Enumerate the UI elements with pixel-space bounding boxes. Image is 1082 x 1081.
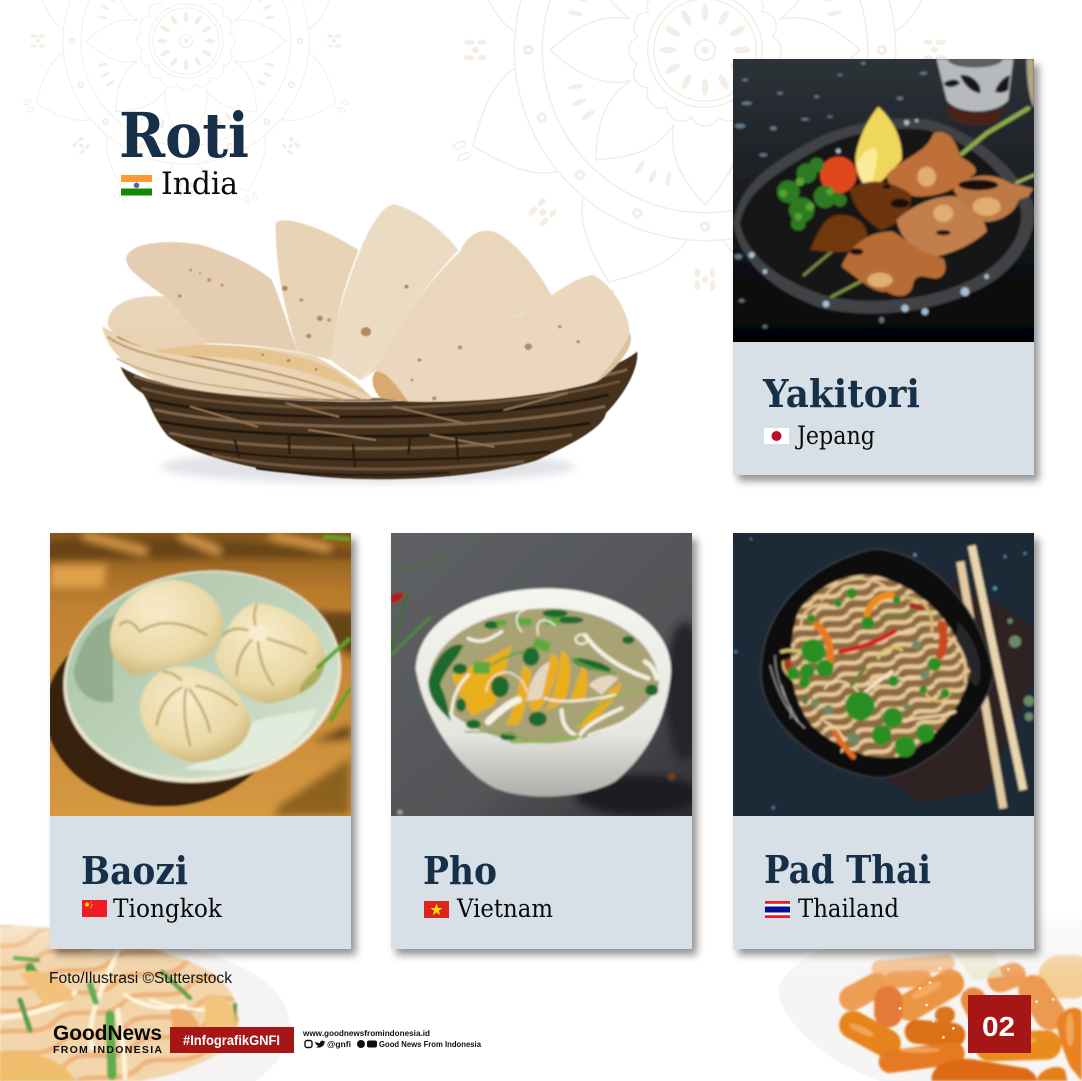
background mandala left xyxy=(23,0,349,204)
website and social handles xyxy=(302,1028,482,1049)
photo credit: Foto/Ilustrasi ©Sutterstock xyxy=(49,970,232,987)
photo: baozi on plate xyxy=(50,533,351,816)
card: Pho xyxy=(375,515,715,949)
photo: yakitori skewers on stone plate xyxy=(733,59,1034,342)
flag: Vietnam xyxy=(424,901,449,918)
icon: facebook xyxy=(357,1040,365,1048)
hashtag badge: #InfografikGNFI xyxy=(183,1032,280,1048)
page number badge: 02 xyxy=(982,1011,1015,1042)
flag: China xyxy=(82,900,107,917)
photo: pad thai noodle bowl xyxy=(733,533,1034,816)
logo: GoodNews From Indonesia: FROM INDONESIA xyxy=(53,1044,162,1056)
website and social handles: @gnfi xyxy=(327,1040,351,1049)
country label: Vietnam: Vietnam xyxy=(456,894,553,923)
flag: Japan xyxy=(764,428,789,444)
website and social handles: www.goodnewsfromindonesia.id xyxy=(302,1028,430,1038)
flag: Thailand xyxy=(765,901,790,918)
photo: faded noodles on plate, bottom left xyxy=(0,924,289,1081)
website and social handles: Good News From Indonesia xyxy=(379,1040,482,1049)
yakitori title: Yakitori xyxy=(762,371,920,416)
card: Pad Thai xyxy=(715,515,1055,949)
icon: instagram xyxy=(305,1040,312,1048)
page number badge xyxy=(968,995,1031,1053)
country label: Tiongkok: Tiongkok xyxy=(113,894,223,923)
country label: India: India xyxy=(161,166,238,202)
hashtag badge xyxy=(170,1027,294,1053)
photo: faded tteokbokki on plate, bottom right xyxy=(778,942,1082,1081)
pad thai title: Pad Thai xyxy=(764,847,931,892)
country label: Thailand: Thailand xyxy=(798,894,899,923)
flag: India xyxy=(121,175,152,196)
icon: youtube xyxy=(367,1040,377,1048)
country label: Jepang: Jepang xyxy=(794,421,875,450)
pho title: Pho xyxy=(423,848,497,893)
card: Yakitori xyxy=(720,40,1060,475)
baozi title: Baozi xyxy=(81,848,188,893)
card: Baozi xyxy=(30,515,370,949)
photo: roti in a wicker basket xyxy=(102,205,637,483)
title: Roti: Roti xyxy=(119,99,249,172)
logo: GoodNews From Indonesia xyxy=(53,1022,162,1056)
background mandala right xyxy=(452,0,958,303)
logo: GoodNews From Indonesia: GoodNews xyxy=(53,1022,162,1045)
photo: pho bowl xyxy=(391,533,692,816)
icon: twitter xyxy=(315,1041,326,1048)
